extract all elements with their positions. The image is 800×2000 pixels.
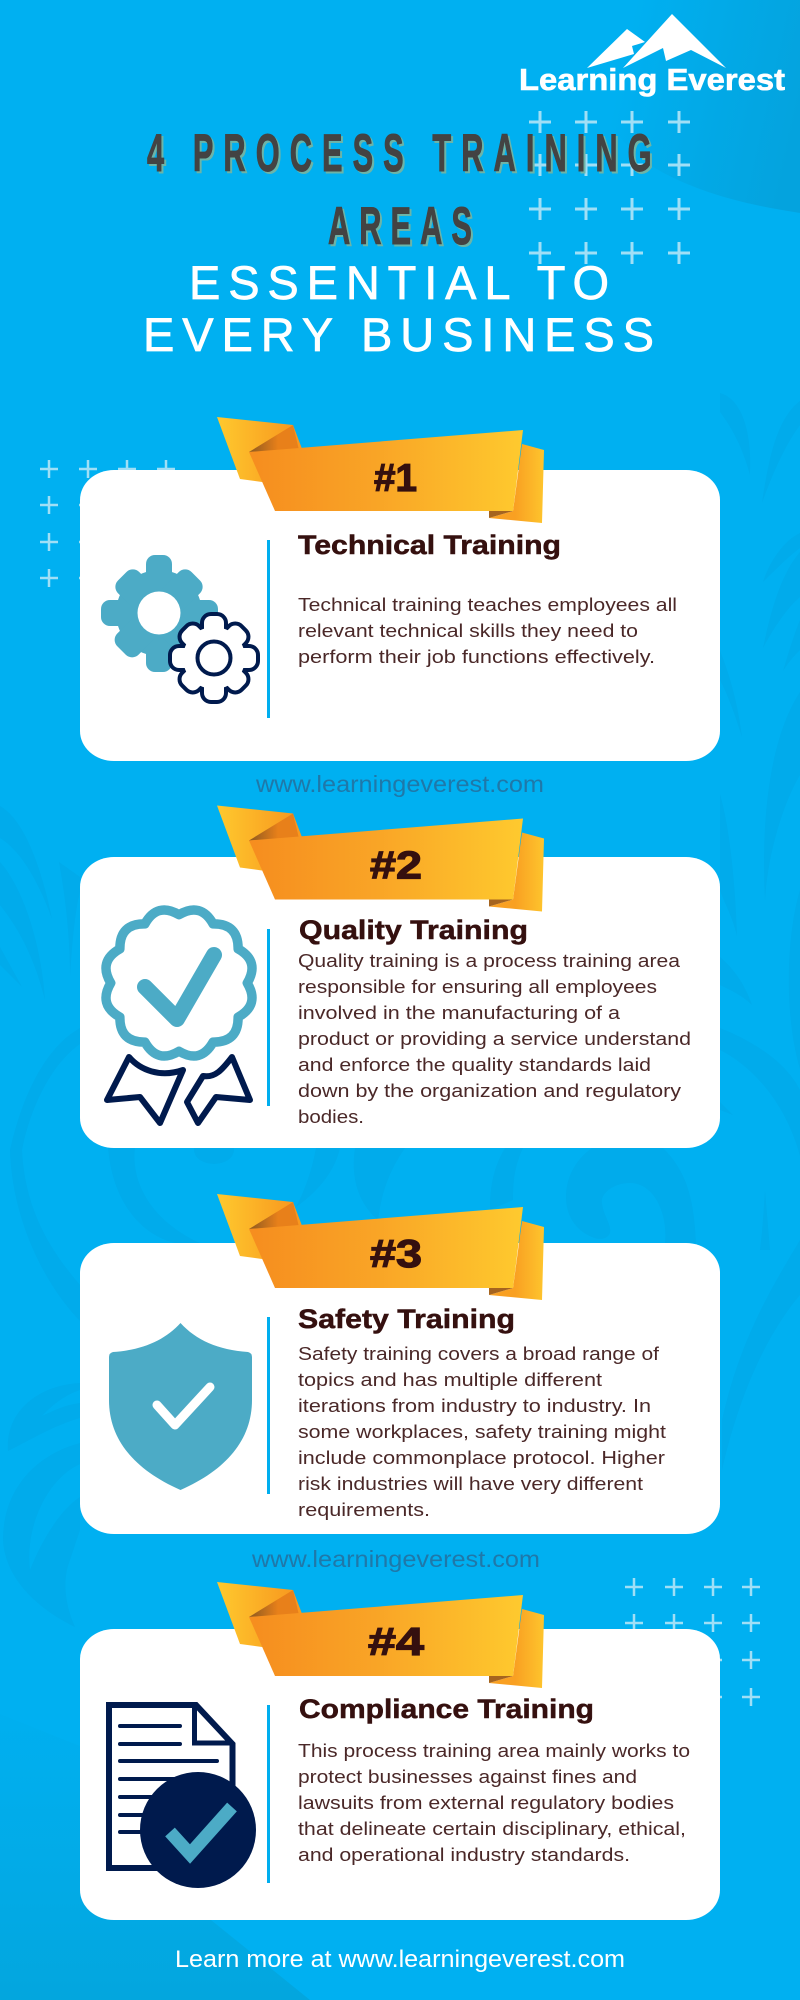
- title: 4 PROCESS TRAINING: [147, 125, 652, 183]
- text: safety training description: some workplaces, safety training might: [298, 1421, 666, 1442]
- url text 2: www.learningeverest.com: [251, 1546, 540, 1572]
- text: quality training description: down by the organization and regulatory: [298, 1080, 682, 1101]
- background: feather pattern: [0, 393, 800, 1627]
- icon: gears: [101, 555, 256, 700]
- heading: compliance training: Compliance Training: [299, 1694, 594, 1724]
- text: safety training description: iterations from industry to industry. In: [298, 1395, 651, 1416]
- text: compliance training description: protect businesses against fines and: [298, 1766, 637, 1787]
- ribbon #4: #4: [368, 1621, 424, 1664]
- background: bottom-left dark shape: [0, 1714, 310, 2000]
- text: safety training description: topics and has multiple different: [298, 1369, 602, 1390]
- heading: quality training: Quality Training: [299, 915, 528, 945]
- ribbon #1: [217, 417, 544, 523]
- text: quality training description: responsible for ensuring all employees: [298, 976, 657, 997]
- ribbon #4: [217, 1582, 544, 1688]
- divider: [267, 929, 270, 1106]
- text: compliance training description: that delineate certain disciplinary, ethical,: [298, 1818, 686, 1839]
- text: technical training description: perform their job functions effectively.: [298, 646, 655, 667]
- background: top-right dark shape: [555, 0, 800, 213]
- text: compliance training description: [298, 1740, 690, 1865]
- text: safety training description: risk industries will have very different: [298, 1473, 643, 1494]
- text: compliance training description: This process training area mainly works to: [298, 1740, 690, 1761]
- logo: Learning Everest: Learning Everest: [519, 62, 785, 97]
- text: compliance training description: lawsuits from external regulatory bodies: [298, 1792, 674, 1813]
- logo: Learning Everest: [519, 14, 785, 97]
- heading: safety training: Safety Training: [298, 1304, 515, 1334]
- footer: learn more: Learn more at www.learningeverest.com: [175, 1946, 625, 1973]
- decorative plus grid: bottom right: [625, 1578, 760, 1706]
- decorative plus grid: left: [40, 460, 175, 587]
- icon: shield: [109, 1323, 252, 1490]
- text: safety training description: requirements.: [298, 1499, 430, 1520]
- title: AREAS: [328, 198, 472, 256]
- ribbon #3: #3: [370, 1233, 422, 1276]
- panel: safety training: [80, 1194, 720, 1534]
- text: quality training description: Quality training is a process training area: [298, 950, 681, 971]
- title: EVERY BUSINESS: [143, 308, 654, 361]
- divider: [267, 1317, 270, 1494]
- text: quality training description: and enforce the quality standards laid: [298, 1054, 651, 1075]
- url text 1: www.learningeverest.com: [255, 771, 544, 797]
- text: safety training description: include commonplace protocol. Higher: [298, 1447, 665, 1468]
- ribbon #3: [217, 1194, 544, 1300]
- text: safety training description: [298, 1343, 666, 1520]
- icon: compliance document: [109, 1705, 256, 1888]
- title: ESSENTIAL TO: [189, 256, 609, 309]
- text: quality training description: [298, 950, 691, 1127]
- divider: [267, 1705, 270, 1883]
- text: quality training description: involved in the manufacturing of a: [298, 1002, 621, 1023]
- ribbon #2: [217, 806, 544, 912]
- text: technical training description: [298, 594, 677, 667]
- divider: [267, 540, 270, 718]
- heading: technical training: Technical Training: [298, 530, 561, 560]
- ribbon #1: #1: [374, 457, 417, 500]
- text: technical training description: relevant technical skills they need to: [298, 620, 638, 641]
- text: safety training description: Safety training covers a broad range of: [298, 1343, 660, 1364]
- panel: quality training: [80, 806, 720, 1148]
- text: compliance training description: and operational industry standards.: [298, 1844, 630, 1865]
- panel: technical training: [80, 417, 720, 761]
- text: quality training description: product or providing a service understand: [298, 1028, 691, 1049]
- panel: compliance training: [80, 1582, 720, 1920]
- text: technical training description: Technical training teaches employees all: [298, 594, 677, 615]
- text: quality training description: bodies.: [298, 1106, 364, 1127]
- title: [143, 125, 654, 361]
- ribbon #2: #2: [370, 844, 422, 888]
- decorative plus grid: top right: [529, 111, 690, 264]
- icon: quality badge: [106, 910, 252, 1123]
